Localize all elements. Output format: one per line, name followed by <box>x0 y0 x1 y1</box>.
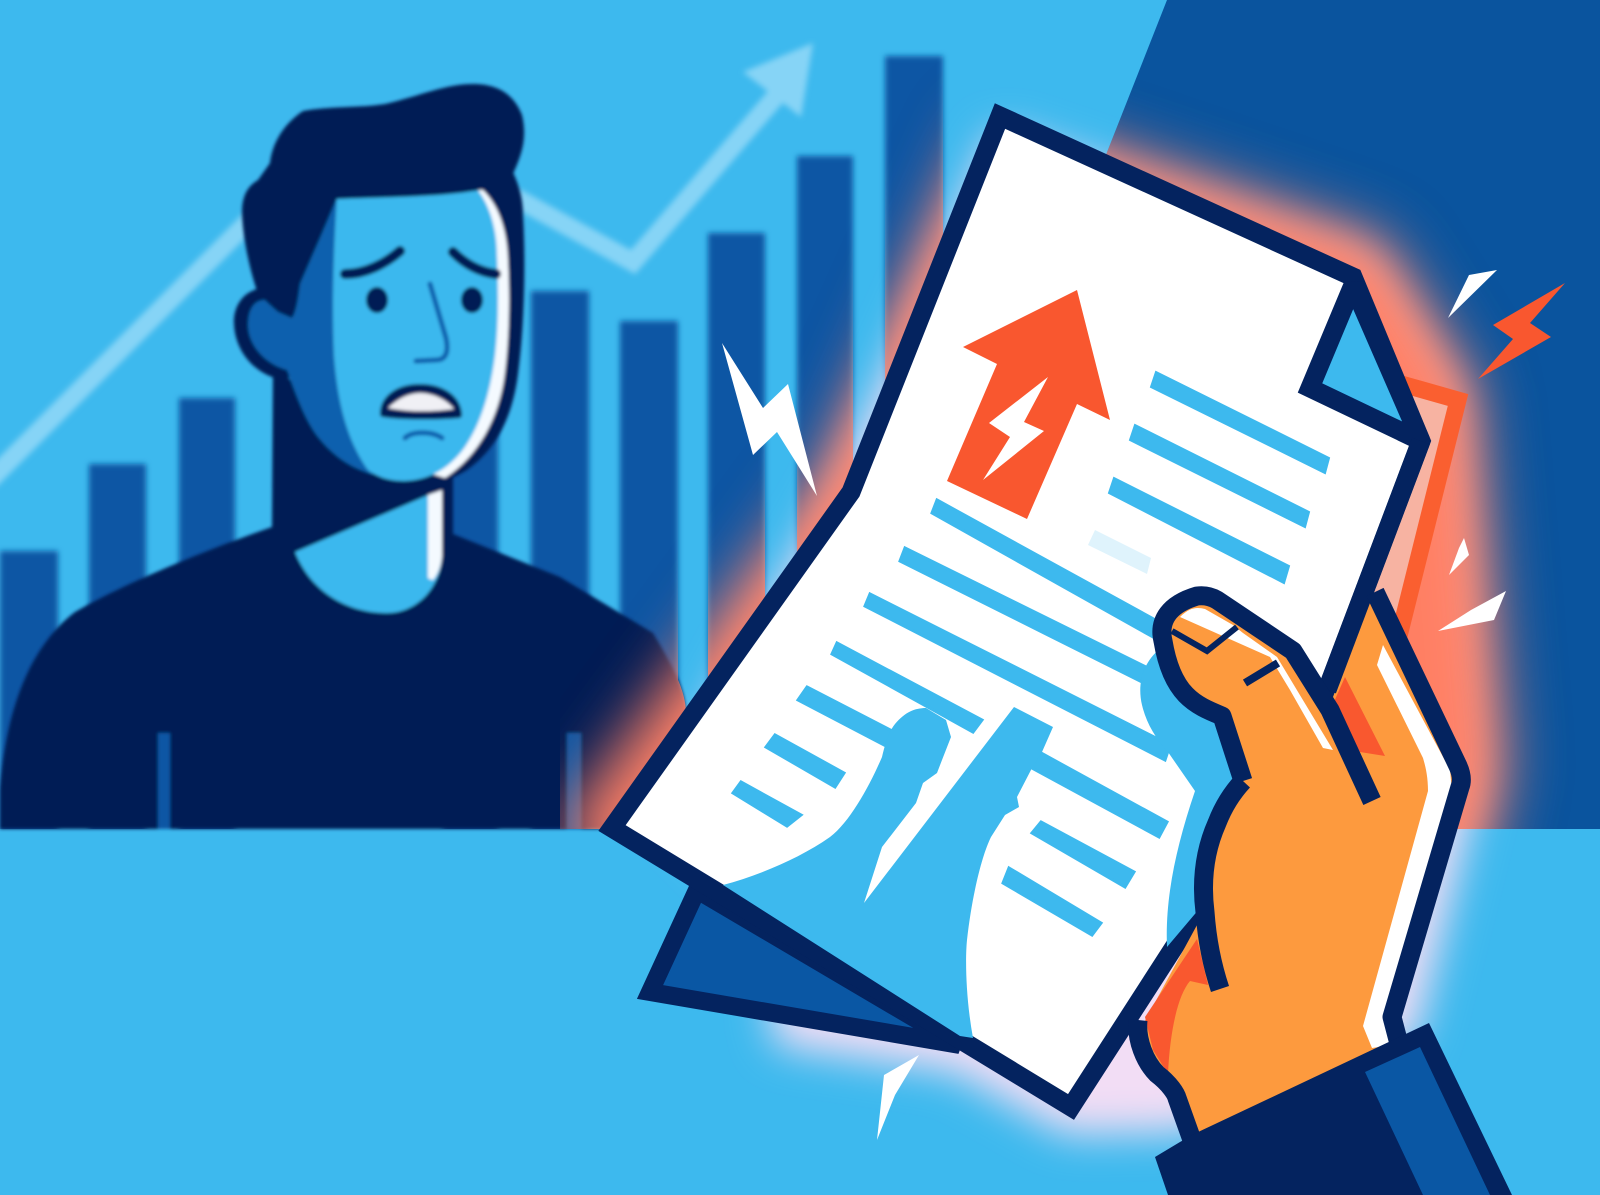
worried man <box>0 84 686 829</box>
man: eyes <box>366 287 483 313</box>
bill: long text lines <box>733 500 1170 935</box>
hand: red shadow at palm <box>1145 939 1208 1074</box>
man: eyebrows <box>345 251 496 274</box>
hand: thumbnail line <box>1172 627 1237 651</box>
man: head outline <box>285 170 524 488</box>
man: shirt creases <box>158 733 581 829</box>
bill document <box>612 116 1421 1107</box>
bill: page corner fold <box>1310 285 1421 441</box>
man: mouth <box>383 387 459 416</box>
white spark bottom <box>877 1055 919 1140</box>
man: ear outline <box>234 289 300 378</box>
man: inner ear <box>248 300 305 370</box>
salmon glow on dark areas <box>560 100 1554 829</box>
man: nose <box>416 284 447 361</box>
hand: knuckle line <box>1245 663 1278 683</box>
man: torso <box>0 370 686 829</box>
man: chin crease <box>405 433 442 438</box>
hand: thumb highlight <box>1180 608 1333 750</box>
dark blue wall panel <box>1100 0 1600 829</box>
hand: outlines <box>1138 441 1461 1140</box>
red lightning spark <box>1478 283 1565 379</box>
man: face <box>333 189 498 481</box>
man: hair <box>242 84 524 318</box>
orange sheet behind the bill <box>1340 385 1458 640</box>
bill: red up arrow <box>947 290 1110 519</box>
bill: torn blue shape <box>723 707 1053 1038</box>
ground <box>0 829 1600 1195</box>
bill: short text lines <box>1109 372 1329 583</box>
second sheet under the bill <box>650 890 960 1045</box>
white sparks right <box>1438 270 1506 631</box>
white lightning spark left <box>722 343 817 496</box>
hand holding the bill <box>1138 441 1463 1140</box>
hand: red shadow on fingers <box>1333 677 1385 756</box>
man: face shadow <box>287 198 420 474</box>
blurred bar chart <box>0 56 943 846</box>
pale glow around the bill <box>680 150 1462 1117</box>
man: face highlight <box>432 188 509 478</box>
bill: blue shadow by thumb <box>1140 640 1245 947</box>
man: neck <box>295 490 442 613</box>
bill: faint line <box>1088 530 1151 574</box>
hand: white edge highlight <box>1363 645 1452 1048</box>
shirt cuff <box>1155 1023 1512 1195</box>
bill: paper <box>612 116 1421 1107</box>
hand: skin <box>1140 596 1463 1140</box>
cuff: blue panel <box>1365 1047 1490 1195</box>
bill: lightning in arrow <box>983 377 1048 480</box>
rising trend arrow <box>0 43 813 480</box>
